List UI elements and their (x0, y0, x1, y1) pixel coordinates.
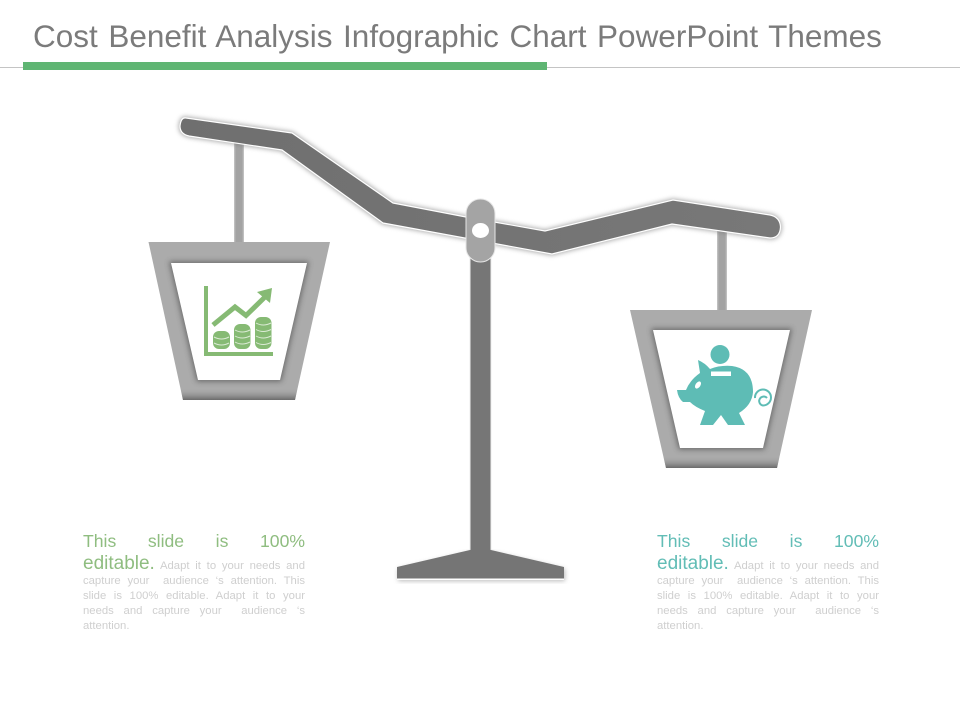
text block: right: slide is 100% editable. Adapt it to your (657, 590, 879, 602)
text block: left: attention. (83, 620, 129, 632)
text block: left: editable. Adapt it to your needs and (83, 553, 305, 574)
title: Cost Benefit Analysis Infographic Chart PowerPoint Themes (33, 18, 882, 54)
scale base (397, 550, 565, 581)
icon: growth chart with coin stacks (204, 286, 273, 356)
text block: left: needs and capture your audience ‘s (83, 605, 305, 617)
text block: left: This slide is 100% (83, 531, 305, 551)
text block: right: attention. (657, 620, 703, 632)
pivot with hole (466, 199, 495, 262)
right bucket (630, 310, 812, 468)
text block: left (83, 531, 305, 632)
text block: right: needs and capture your audience ‘s (657, 605, 879, 617)
balance scale (148, 114, 812, 584)
text block: right: capture your audience ‘s attention. This (657, 575, 879, 587)
beam (180, 118, 780, 254)
center post (470, 258, 491, 552)
text block: left: capture your audience ‘s attention. This (83, 575, 305, 587)
icon: piggy bank with coin (677, 345, 771, 425)
right hanging rod (717, 230, 727, 311)
text block: right: editable. Adapt it to your needs and (657, 553, 879, 574)
left bucket (148, 242, 330, 400)
left hanging rod (234, 143, 244, 243)
title underline (0, 62, 960, 70)
text block: left: slide is 100% editable. Adapt it to your (83, 590, 305, 602)
text block: right: This slide is 100% (657, 531, 879, 551)
text block: right (657, 531, 879, 632)
